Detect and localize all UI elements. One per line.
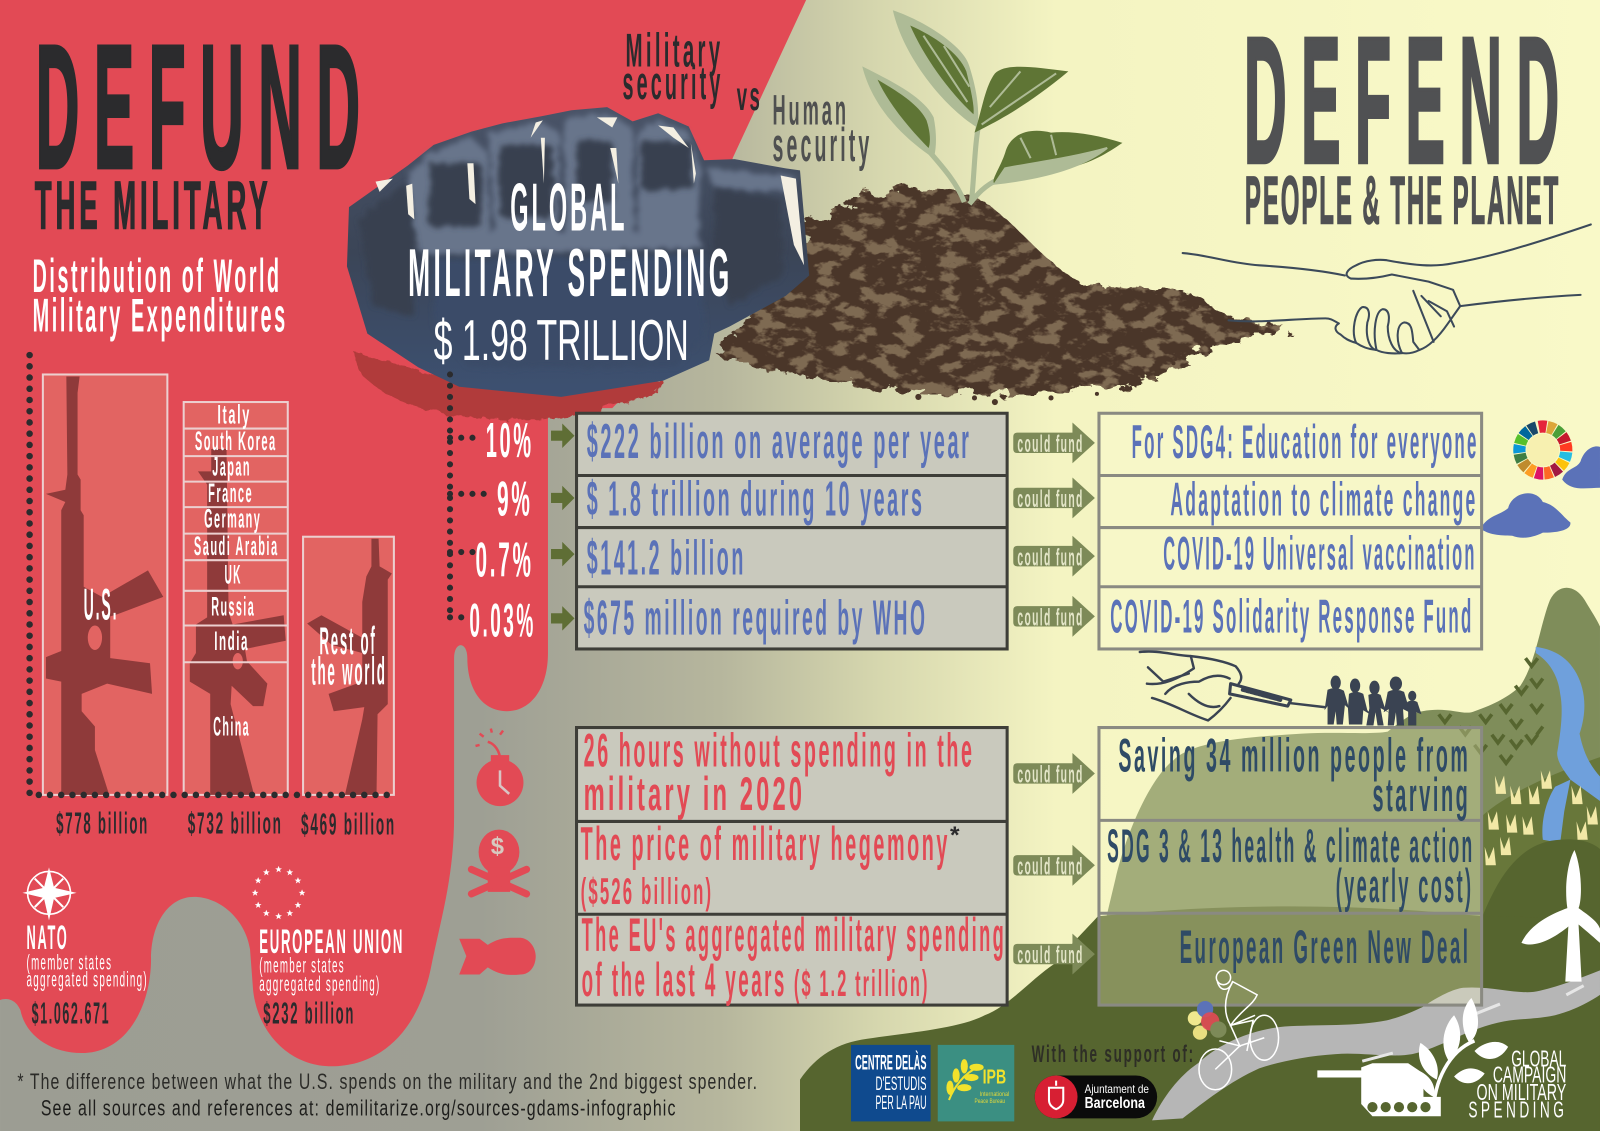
arrow 1	[1013, 422, 1095, 463]
icon: EU stars	[252, 866, 305, 919]
landscape: hills, river and road	[800, 588, 1600, 1131]
text: $675 million required by WHO	[584, 592, 928, 646]
country labels: Japan	[212, 452, 251, 482]
text: could fund	[1017, 486, 1084, 513]
bar: U.S.	[43, 374, 167, 795]
icon: NATO compass star	[22, 867, 77, 920]
text: DEFUND	[36, 9, 374, 205]
text: Rest of	[319, 620, 377, 663]
arrow 7	[1013, 934, 1095, 974]
text: security	[772, 119, 872, 171]
text: The price of military hegemony	[581, 818, 950, 870]
text: Distribution of World	[33, 250, 282, 302]
nato block	[22, 867, 148, 1030]
plant sprout	[862, 10, 1122, 204]
soil crumbs	[915, 303, 1206, 405]
heading: military security vs human security	[622, 24, 872, 171]
icon: wind turbine	[1521, 850, 1600, 982]
text: aggregated spending)	[27, 968, 148, 992]
text: CENTRE DELÀS	[855, 1049, 927, 1074]
red military area	[0, 0, 806, 1066]
table: military cost comparisons: ($526 billion)	[581, 871, 713, 912]
heading: military security vs human security: security	[622, 57, 723, 109]
european union block: $232 billion	[263, 996, 355, 1030]
grenade fist with global military spending	[347, 107, 809, 397]
text: could fund	[1017, 853, 1084, 880]
text: PER LA PAU	[876, 1092, 927, 1114]
arrow 2	[1013, 478, 1095, 518]
logo: Ajuntament de Barcelona: Barcelona	[1085, 1095, 1145, 1112]
country labels: UK	[225, 560, 242, 590]
country labels: Italy	[217, 399, 251, 429]
soil mound	[714, 188, 1288, 394]
support label: With the support of:	[1032, 1041, 1195, 1068]
icon: cyclist with balloons	[1188, 970, 1279, 1090]
bar chart: world military expenditure: South Korea	[195, 426, 277, 456]
logo: International Peace Bureau: IPB	[983, 1067, 1006, 1089]
icon: tank with olive branch	[1317, 998, 1508, 1116]
label: rest of the world	[311, 620, 387, 694]
text: 10%	[486, 414, 534, 468]
table: military cost comparisons	[577, 724, 1007, 1006]
icon: clock bomb	[476, 729, 523, 806]
table: military cost comparisons: ($ 1.2 trillion)	[794, 963, 930, 1004]
table: military cost comparisons: military in 2020	[584, 768, 805, 820]
blood brush stroke under grenade	[352, 350, 663, 419]
text: EUROPEAN UNION	[259, 923, 404, 961]
bar: other top spenders stack	[184, 399, 288, 795]
value labels: $732 billion	[188, 807, 283, 841]
icon: aerial bomb	[459, 938, 536, 975]
european union block	[252, 866, 404, 1030]
logo: Ajuntament de Barcelona	[1035, 1075, 1157, 1118]
footnote	[17, 1069, 758, 1120]
text: starving	[1372, 769, 1470, 821]
text: $222 billion on average per year	[587, 415, 971, 469]
arrow 5	[1013, 753, 1095, 794]
footnote: * The difference between what the U.S. spends on the military and the 2nd biggest spender.	[17, 1069, 758, 1094]
table: military spending shares: $ 1.8 trillion during 10 years	[587, 472, 924, 526]
text: could fund	[1017, 431, 1084, 458]
connector: dotted percentage lines	[450, 374, 490, 617]
icon: skull with dollar	[471, 830, 527, 894]
country labels: China	[213, 712, 250, 742]
text: 26 hours without spending in the	[584, 724, 974, 776]
heading: military security vs human security: Human	[772, 86, 849, 134]
text: 0.03%	[469, 595, 536, 647]
icon: people silhouettes	[1324, 675, 1421, 725]
text: 0.7%	[476, 534, 534, 588]
logo: International Peace Bureau: International	[980, 1091, 1009, 1098]
country labels	[194, 399, 279, 742]
text: $469 billion	[301, 808, 396, 842]
logo: Centre Delas	[851, 1045, 931, 1121]
icons: red bomb, skull and bomb	[459, 729, 536, 975]
footnote: See all sources and references at: demilitarize.org/sources-gdams-infographic	[41, 1095, 677, 1120]
text: could fund	[1017, 942, 1084, 969]
logo: International Peace Bureau	[938, 1045, 1014, 1121]
title: DEFUND the military: THE MILITARY	[35, 169, 271, 244]
bar chart: world military expenditure: Saudi Arabia	[194, 531, 279, 561]
bar: U.S.: U.S.	[84, 578, 118, 629]
arrow 6	[1013, 845, 1095, 886]
small green arrows	[551, 423, 574, 631]
nato block: (member states	[27, 950, 112, 974]
country labels: Russia	[211, 591, 255, 621]
country labels: Germany	[204, 504, 261, 534]
icon: skull with dollar: $	[491, 833, 507, 860]
country labels: India	[214, 626, 249, 656]
text: Military Expenditures	[33, 290, 288, 342]
logo: Ajuntament de Barcelona: Ajuntament de	[1085, 1082, 1149, 1096]
icon: hand with syringe	[1140, 652, 1324, 720]
table: military cost comparisons: *	[950, 822, 963, 849]
european union block: aggregated spending)	[259, 972, 381, 996]
percentages	[469, 414, 536, 647]
table: what it could fund	[1099, 413, 1482, 649]
european union block: (member states	[259, 953, 345, 977]
text: the world	[311, 651, 387, 694]
table: military spending shares: $141.2 billion	[587, 531, 746, 585]
logo: Centre Delas: D'ESTUDIS	[876, 1073, 927, 1095]
table: green alternatives	[1099, 728, 1482, 1005]
icon: handshake	[1183, 224, 1591, 353]
text: MILITARY SPENDING	[408, 236, 733, 311]
heading: military security vs human security: Military	[626, 24, 723, 76]
logo: International Peace Bureau: Peace Bureau	[974, 1098, 1005, 1105]
text: could fund	[1017, 604, 1084, 631]
value labels: $778 billion	[56, 807, 149, 841]
bar chart: world military expenditure	[43, 374, 396, 842]
text: could fund	[1017, 544, 1084, 571]
heading: distribution of world military expenditures	[33, 250, 288, 342]
title: DEFUND the military	[35, 9, 374, 244]
label: global military spending: $ 1.98 TRILLION	[434, 309, 689, 373]
bar: rest of the world	[303, 537, 394, 795]
heading: military security vs human security: vs	[737, 73, 762, 119]
hill decoration: chevrons and tufts	[1439, 658, 1598, 865]
arrow 3	[1013, 536, 1095, 577]
logo: global campaign on military spending	[1317, 998, 1567, 1122]
text: could fund	[1017, 762, 1084, 789]
nato block: $1.062.671	[32, 996, 110, 1030]
icon: SDG colour wheel	[1510, 417, 1576, 483]
icon: clouds	[1481, 446, 1600, 538]
country labels: France	[208, 478, 253, 508]
arrow 4	[1013, 596, 1095, 637]
label: global military spending: GLOBAL	[510, 171, 628, 246]
nato block: NATO	[27, 919, 68, 957]
table: military spending shares	[577, 413, 1007, 649]
table: military cost comparisons: of the last 4 years	[582, 954, 787, 1006]
could fund arrows	[1013, 422, 1095, 974]
text: 9%	[497, 472, 533, 526]
value labels	[56, 807, 396, 842]
label: global military spending	[408, 171, 733, 373]
